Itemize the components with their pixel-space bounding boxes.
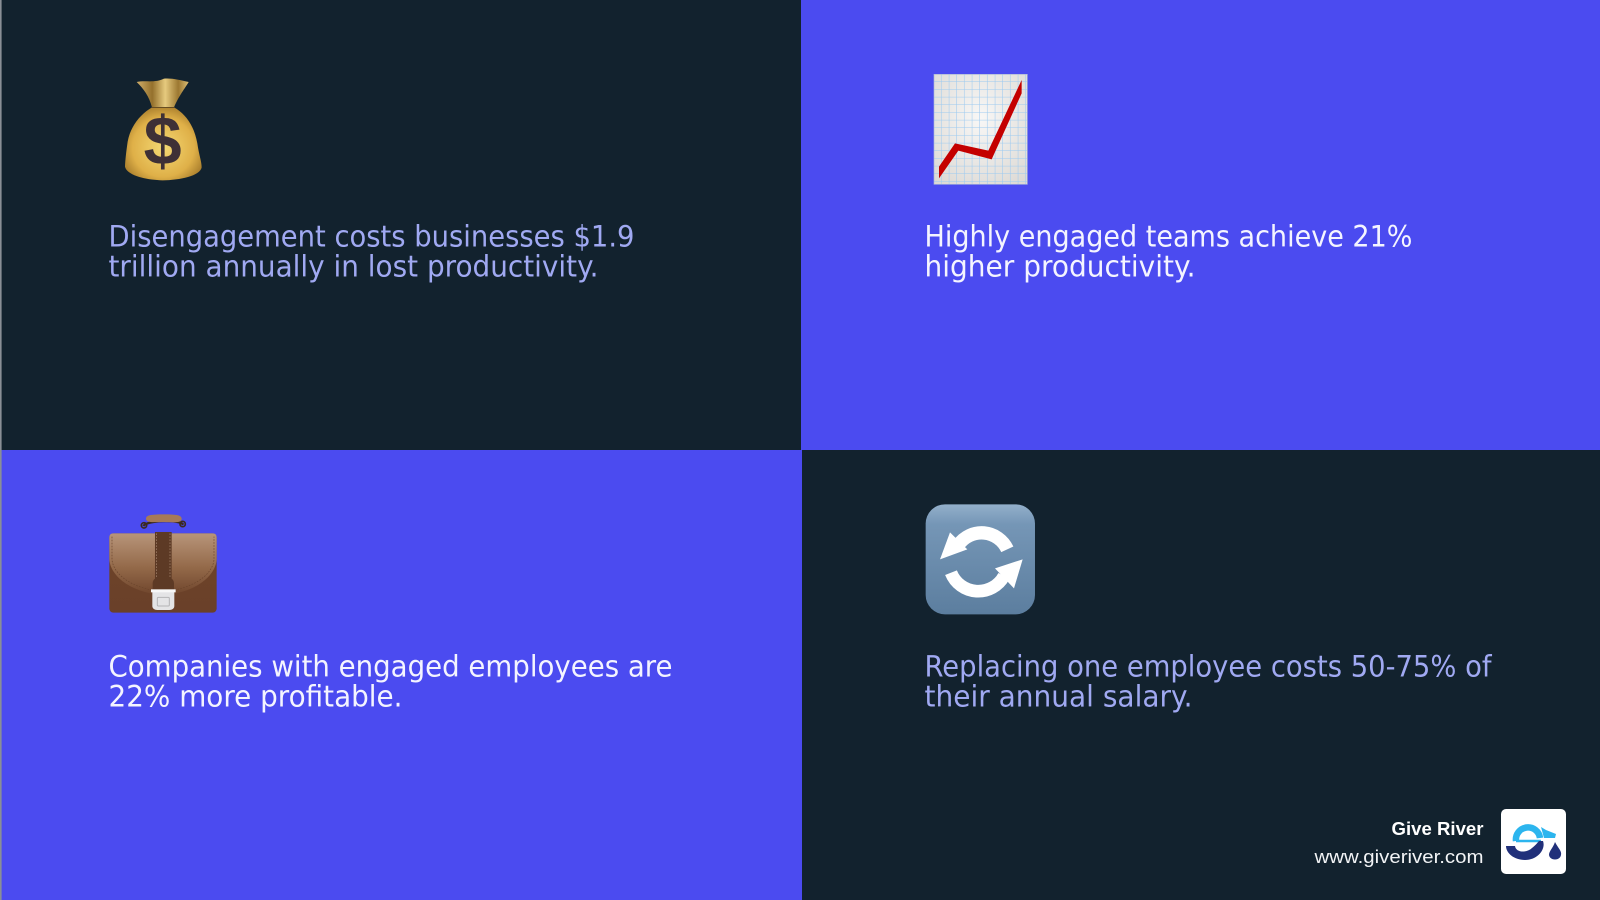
- text: team productivity: Highly engaged teams achieve 21%: [924, 220, 1412, 254]
- decorative left edge: [0, 0, 2, 900]
- icon: money bag: [125, 79, 202, 180]
- text: disengagement cost: trillion annually in lost productivity.: [108, 250, 598, 284]
- panel: profitability: [0, 450, 802, 900]
- website url: www.giveriver.com: [1313, 846, 1484, 867]
- text: replacement cost: their annual salary.: [924, 680, 1192, 714]
- icon: money bag: $: [144, 103, 182, 179]
- brand name: Give River: [1392, 818, 1484, 839]
- icon: briefcase: [109, 514, 217, 613]
- text: replacement cost: Replacing one employee costs 50-75% of: [924, 650, 1492, 684]
- panel: disengagement cost: [0, 0, 801, 450]
- panel: replacement cost: [802, 450, 1600, 900]
- text: team productivity: higher productivity.: [924, 250, 1196, 284]
- logo: [1501, 809, 1566, 874]
- icon: refresh arrows: [926, 504, 1035, 614]
- footer branding: [1313, 809, 1566, 874]
- panel: team productivity: [801, 0, 1600, 450]
- icon: chart increasing: [934, 74, 1027, 184]
- text: profitability: Companies with engaged employees are: [108, 650, 672, 684]
- text: profitability: 22% more profitable.: [108, 680, 402, 714]
- text: disengagement cost: Disengagement costs businesses $1.9: [108, 220, 634, 254]
